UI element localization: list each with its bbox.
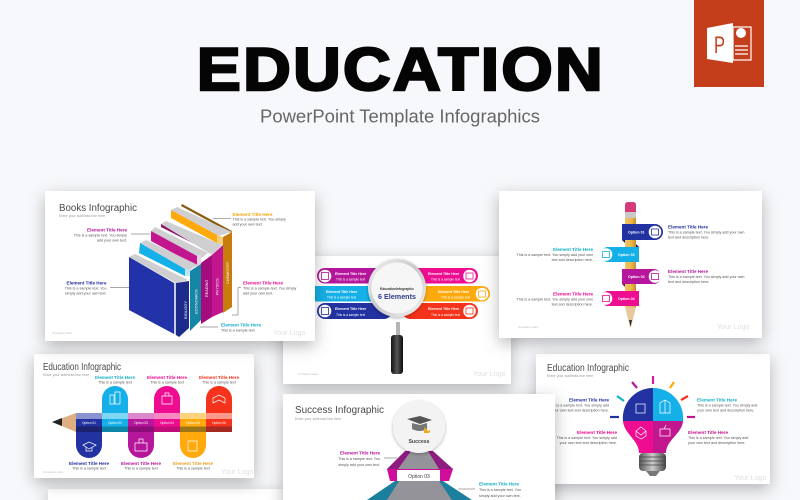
- callout: lower left: text and description here.: [552, 302, 593, 306]
- option 02 tab: [600, 244, 639, 262]
- pencil body segments: Option 03: [134, 421, 148, 425]
- pencil body segments: Option 04: [160, 421, 174, 425]
- callout: top left: [549, 398, 609, 412]
- callout: top right: [668, 224, 744, 240]
- callout: lower left: [517, 292, 593, 306]
- callout: bottom left: Element Title Here: [577, 430, 617, 435]
- callout: top right: This is a sample text. You simply add your own: [668, 230, 744, 234]
- books illustration: PHYSICS: [216, 278, 220, 295]
- callout: bottom right: [688, 430, 748, 445]
- callouts above: This is a sample text: [98, 380, 132, 384]
- callout: top left: This is a sample text. You simply add: [549, 404, 609, 408]
- callouts below: This is a sample text: [124, 466, 158, 470]
- callout: biology: simply add your own text.: [65, 292, 106, 296]
- pencil tip: [52, 413, 76, 432]
- rays: [610, 376, 695, 417]
- callout: top right: your own text and description here.: [697, 408, 754, 412]
- callouts above: [95, 375, 239, 384]
- callout: teal: This is a sample text. You: [479, 488, 521, 492]
- logo: Your Logo: [273, 328, 306, 337]
- books illustration: READING: [205, 280, 209, 297]
- callout: lower right: This is a sample text. You simply add your own: [668, 275, 744, 279]
- logo: Your Logo: [717, 322, 750, 331]
- callout: economics: This is a sample text: [221, 328, 255, 332]
- callout: physics: add your own text.: [243, 292, 273, 296]
- left option pills: This is a sample text: [336, 278, 365, 282]
- callout: reading: Element Title Here: [87, 228, 127, 232]
- callout: teal: [458, 482, 521, 498]
- success badge: [393, 401, 445, 453]
- pencil: [625, 202, 636, 327]
- callout: lower left: Element Title Here: [553, 292, 593, 296]
- callout: purple: This is a sample text. You: [338, 457, 380, 461]
- books illustration: ECONOMICS: [194, 289, 198, 314]
- callout: top right: Element Title Here: [668, 224, 708, 230]
- left option pills: This is a sample text: [327, 296, 356, 300]
- pencil body segments: Option 01: [82, 421, 96, 425]
- callout: lower right: [668, 269, 744, 284]
- callouts below: Element Title Here: [69, 461, 109, 466]
- books illustration: [129, 204, 232, 337]
- left option pills: This is a sample text: [336, 313, 365, 317]
- callout: chemistry: [213, 212, 286, 226]
- callout: reading: This is a sample text. You simply: [74, 234, 127, 238]
- pencil body segments: Option 06: [212, 421, 226, 425]
- option 03 tab: [622, 269, 661, 287]
- callout: bottom right: your own text and description here.: [688, 441, 745, 445]
- pyramid: Option 03: [408, 474, 430, 480]
- callout: purple: [338, 450, 397, 467]
- callout: chemistry: Element Title Here: [232, 212, 273, 217]
- callout: biology: This is a sample text. You: [65, 286, 106, 290]
- pencil body segments: Option 05: [186, 421, 200, 425]
- callout: reading: add your own text.: [97, 238, 127, 242]
- callout: upper left: [517, 247, 593, 262]
- right option pills: Element Title Here: [428, 272, 459, 276]
- subheading: Enter your subhead line here: [43, 373, 89, 377]
- right option pills: This is a sample text: [441, 296, 470, 300]
- title: EDUCATION: [197, 37, 603, 103]
- callout: physics: This is a sample text. You simply: [243, 286, 296, 290]
- callouts above: This is a sample text: [150, 380, 184, 384]
- callouts above: This is a sample text: [202, 380, 236, 384]
- callout: lower right: text and description here.: [668, 280, 709, 284]
- callout: teal: simply add your own text.: [479, 494, 521, 498]
- upper caps: [102, 386, 232, 413]
- callouts above: Element Title Here: [147, 375, 187, 380]
- callout: physics: [232, 280, 296, 315]
- callout: bottom left: [557, 430, 617, 445]
- left option pills: Element Title Here: [335, 272, 366, 276]
- subtitle: PowerPoint Template Infographics: [260, 106, 540, 126]
- callouts below: Element Title Here: [121, 461, 161, 466]
- callout: chemistry: add your own text.: [232, 222, 263, 226]
- pyramid: [367, 451, 472, 500]
- icon: PowerPoint logo: [694, 0, 764, 87]
- callout: economics: Element Title Here: [221, 322, 261, 328]
- callouts below: This is a sample text: [176, 466, 210, 470]
- callout: top right: Element Title Here: [697, 398, 737, 402]
- subheading: Enter your subhead line here: [295, 417, 341, 421]
- heading: Success Infographic: [295, 405, 384, 416]
- callouts below: [69, 461, 213, 470]
- heading: Books Infographic: [59, 203, 137, 214]
- lightbulb: [623, 388, 683, 476]
- left option pills: [305, 268, 392, 319]
- pencil body segments: [76, 413, 232, 432]
- callout: purple: simply add your own text.: [338, 463, 380, 467]
- right option pills: Element Title Here: [428, 307, 459, 311]
- panel: books infographic: [45, 191, 315, 341]
- callout: bottom right: Element Title Here: [688, 430, 728, 435]
- callout: purple: Element Title Here: [340, 450, 380, 456]
- panel: success infographic: [283, 394, 555, 500]
- logo: Your Logo: [734, 473, 767, 482]
- magnifier: 6 Elements: [378, 292, 416, 301]
- lower caps: [76, 432, 206, 458]
- option 01 tab: Option 01: [628, 230, 645, 234]
- footer: Company Here: [298, 372, 319, 376]
- callout: biology: Element Title Here: [66, 280, 107, 286]
- option 02 tab: Option 02: [618, 253, 635, 257]
- callout: top right: text and description here.: [668, 236, 709, 240]
- panel: lightbulb infographic: [536, 354, 770, 484]
- logo: Your Logo: [473, 369, 506, 378]
- callout: chemistry: This is a sample text. You simply: [232, 218, 286, 222]
- right option pills: [402, 268, 490, 319]
- panel: bottom slide peek: [48, 489, 288, 500]
- callout: upper left: This is a sample text. You simply add your own: [517, 253, 593, 257]
- footer: Company Here: [43, 470, 64, 474]
- callout: teal: Element Title Here: [479, 482, 519, 486]
- callout: bottom left: This is a sample text. You simply add: [557, 436, 617, 440]
- logo: Your Logo: [221, 467, 254, 476]
- callouts below: This is a sample text: [72, 466, 106, 470]
- heading: Education Infographic: [547, 363, 629, 374]
- left option pills: Element Title Here: [326, 290, 357, 294]
- callout: top left: Element Title Here: [569, 398, 609, 402]
- right option pills: Element Title Here: [438, 290, 469, 294]
- subheading: Enter your subhead line here: [59, 214, 105, 218]
- option 04 tab: [600, 291, 639, 306]
- option 04 tab: Option 04: [618, 297, 635, 301]
- callout: physics: Element Title Here: [243, 280, 283, 286]
- books illustration: CHEMISTRY: [226, 261, 230, 284]
- option 03 tab: Option 03: [628, 275, 645, 279]
- callout: top left: your own text and description here.: [552, 408, 609, 412]
- callout: economics: [200, 322, 261, 332]
- panel: six elements magnifier: [283, 256, 511, 384]
- magnifier: [368, 259, 426, 374]
- callout: top right: This is a sample text. You simply add: [697, 404, 757, 408]
- panel: pencil timeline infographic: [34, 354, 254, 478]
- callout: biology: [65, 280, 129, 296]
- callout: upper left: Element Title Here: [553, 247, 593, 252]
- callout: lower right: Element Title Here: [668, 269, 708, 274]
- right option pills: This is a sample text: [431, 313, 460, 317]
- left option pills: Element Title Here: [335, 307, 366, 311]
- heading: Education Infographic: [43, 362, 121, 373]
- callouts above: Element Title Here: [199, 375, 239, 380]
- panel: pencil infographic: [499, 191, 762, 338]
- success badge: Success: [408, 439, 430, 445]
- footer: Company Here: [518, 325, 539, 329]
- callouts above: Element Title Here: [95, 375, 135, 380]
- subheading: Enter your subhead line here: [547, 374, 593, 378]
- callout: bottom right: This is a sample text. You simply add: [688, 436, 748, 440]
- magnifier: EducationInfographic: [380, 287, 414, 291]
- books illustration: BIOLOGY: [183, 301, 188, 319]
- icon: PowerPoint logo: P: [714, 32, 725, 59]
- callout: lower left: This is a sample text. You simply add your own: [517, 298, 593, 302]
- callout: bottom left: your own text and description here.: [560, 441, 617, 445]
- option 01 tab: [622, 224, 663, 243]
- callout: top right: [697, 398, 757, 412]
- callout: reading: [74, 228, 150, 242]
- pencil body segments: Option 02: [108, 421, 122, 425]
- callouts below: Element Title Here: [173, 461, 213, 466]
- footer: Company Here: [52, 331, 73, 335]
- right option pills: This is a sample text: [431, 278, 460, 282]
- callout: upper left: text and description here.: [552, 258, 593, 262]
